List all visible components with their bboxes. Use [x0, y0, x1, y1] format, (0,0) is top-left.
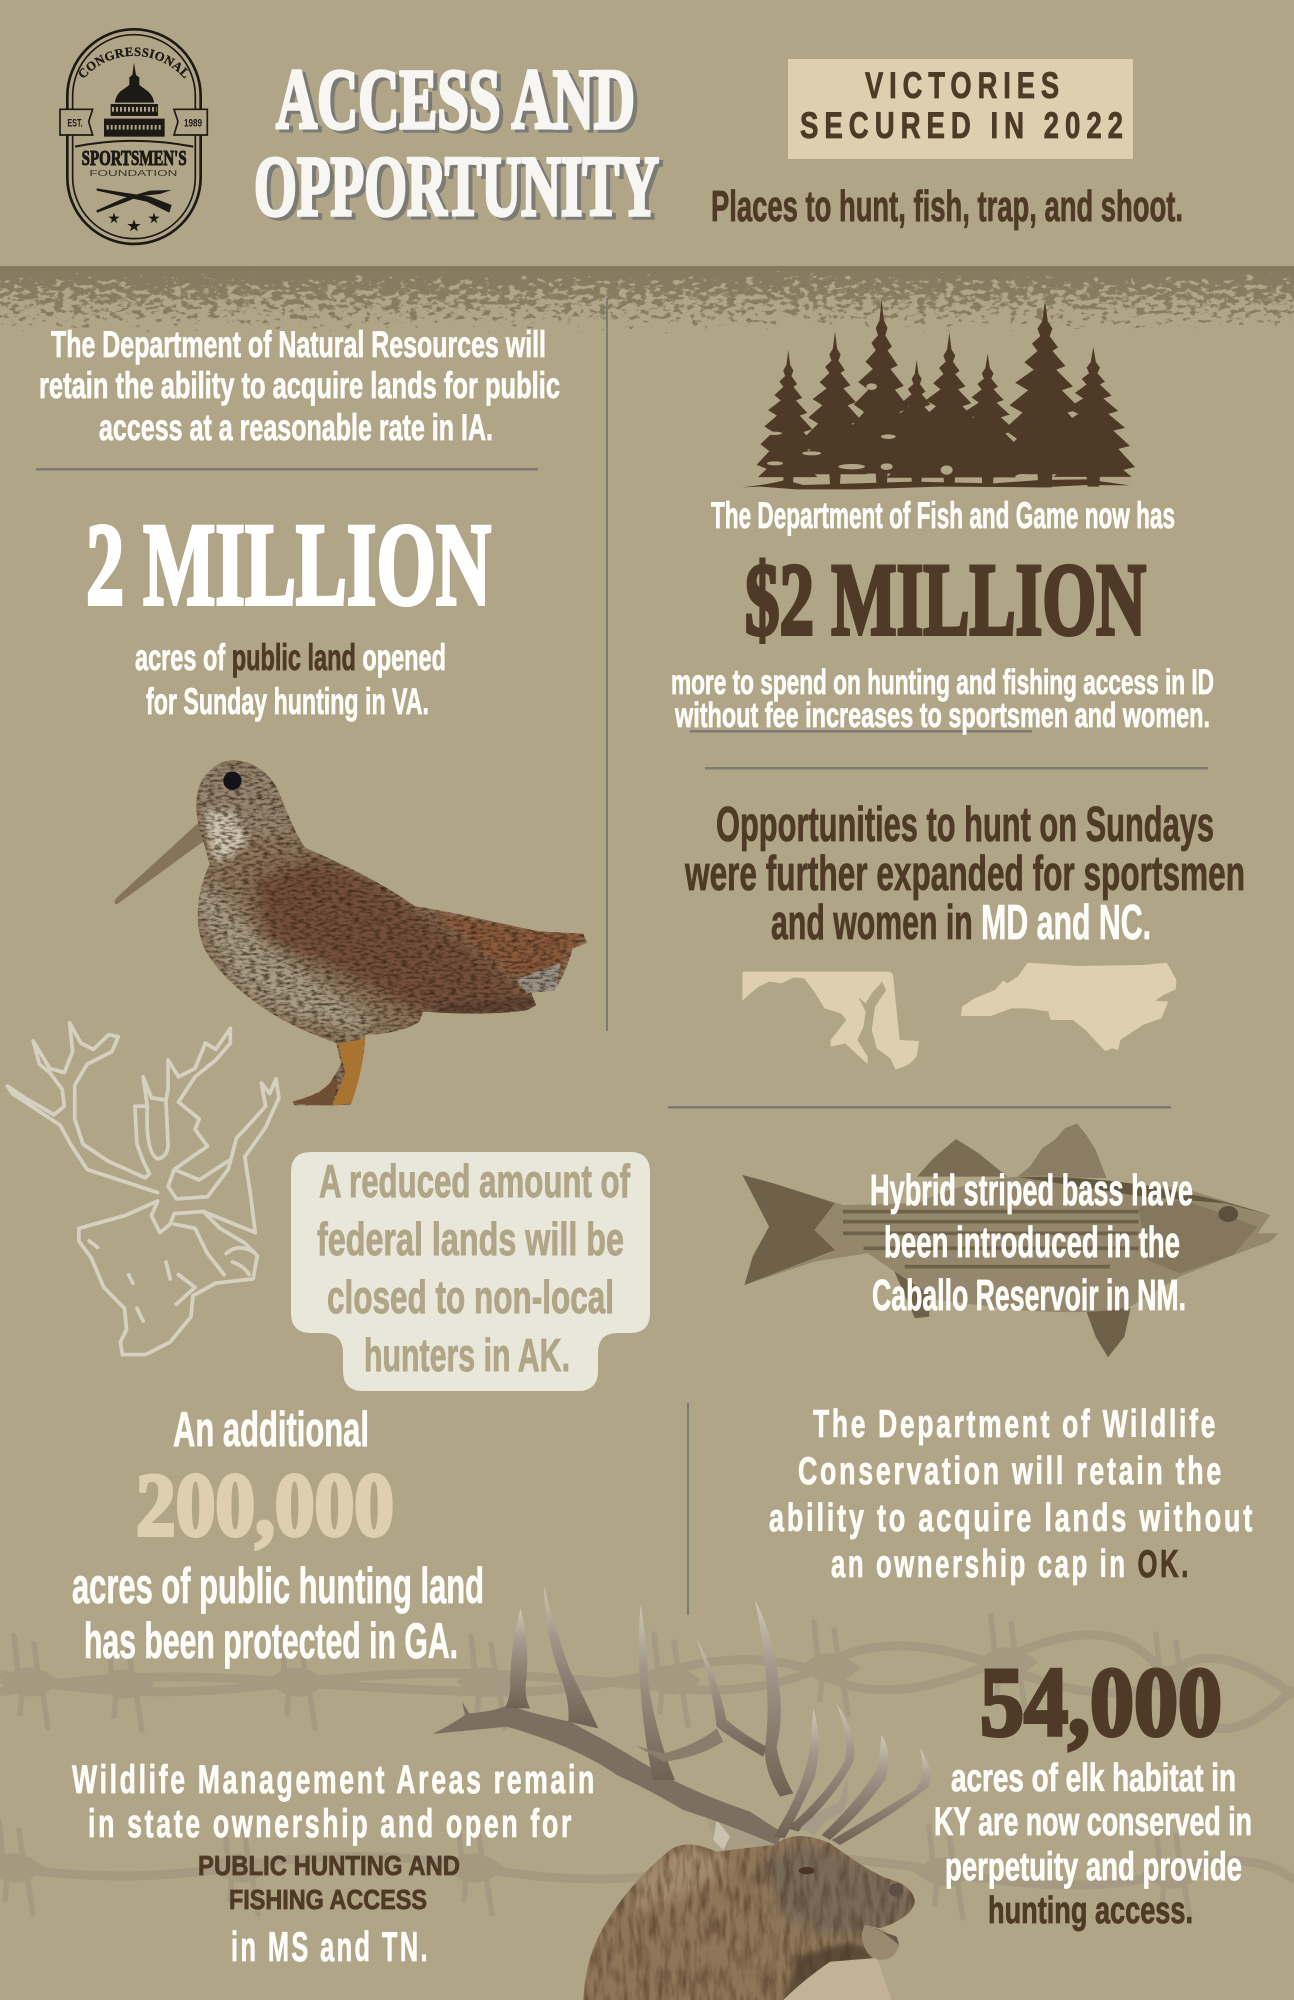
- text: Oklahoma wildlife conservation: [769, 1403, 1255, 1586]
- text: wildlife management areas: in MS and TN.: [231, 1923, 430, 1970]
- maps: Maryland and North Carolina: [742, 963, 1177, 1069]
- elk ear: [705, 1815, 773, 1875]
- stat: 2 million acres: for Sunday hunting in VA.: [146, 681, 429, 722]
- logo capitol: [104, 63, 165, 137]
- illustration: pine trees: [742, 300, 1135, 489]
- callout: federal lands in Alaska: closed to non-local: [327, 1271, 614, 1323]
- logo ribbons: EST.: [67, 118, 83, 130]
- text: Sunday hunting in MD and NC: and women in MD and NC.: [771, 896, 1151, 950]
- text: Iowa Department of Natural Resources: retain the ability to acquire lands for public: [39, 365, 560, 406]
- stat: 2 million acres: 2 MILLION: [86, 499, 491, 630]
- callout: federal lands in Alaska: [291, 1152, 650, 1391]
- logo wordmark: FOUNDATION: [89, 169, 178, 178]
- stat: 200,000 acres in Georgia: has been protected in GA.: [84, 1613, 458, 1669]
- badge: victories secured in 2022: VICTORIES: [865, 65, 1065, 106]
- logo: Congressional Sportsmen's Foundation badge: [59, 28, 208, 246]
- logo ribbons: 1989: [184, 118, 202, 130]
- stat: 200,000 acres in Georgia: 200,000: [136, 1456, 394, 1555]
- text: Oklahoma wildlife conservation: an ownership cap in OK.: [831, 1543, 1191, 1586]
- stat: 54,000 acres of elk habitat: 54,000: [980, 1648, 1222, 1757]
- title: OPPORTUNITY: [254, 138, 659, 234]
- text: wildlife management areas: in state ownership and open for: [88, 1802, 574, 1846]
- logo wordmark: [82, 148, 187, 178]
- illustration: striped bass: [742, 1123, 1278, 1357]
- stat: 54,000 acres of elk habitat: hunting access.: [988, 1890, 1193, 1932]
- barbed wire background: [0, 1616, 1294, 1920]
- callout: federal lands in Alaska: hunters in AK.: [364, 1329, 570, 1381]
- illustration: woodcock: [114, 753, 598, 1115]
- stat: 200,000 acres in Georgia: [72, 1403, 484, 1669]
- center vertical divider: [606, 298, 608, 1031]
- text: wildlife management areas: FISHING ACCESS: [229, 1884, 427, 1915]
- bird eye: [223, 772, 242, 790]
- map: North Carolina: [961, 963, 1177, 1051]
- text: Sunday hunting in MD and NC: [684, 798, 1245, 950]
- elk neck and head: [577, 1820, 923, 2000]
- text: wildlife management areas: [72, 1758, 597, 1970]
- text: Iowa Department of Natural Resources: The Department of Natural Resources will: [51, 324, 546, 365]
- title: ACCESS AND: [280, 54, 639, 150]
- logo arc text: CONGRESSIONAL: [79, 47, 188, 78]
- elk antlers: [433, 1586, 930, 1845]
- logo ribbons: [60, 109, 207, 135]
- illustration: bull elk: [433, 1586, 930, 2000]
- callout: federal lands in Alaska: A reduced amount of: [319, 1155, 630, 1207]
- badge: victories secured in 2022: SECURED IN 2022: [800, 105, 1129, 146]
- title: [254, 51, 663, 237]
- stat: 200,000 acres in Georgia: An additional: [173, 1403, 369, 1457]
- title: ACCESS AND: [276, 51, 635, 147]
- text: wildlife management areas: Wildlife Management Areas remain: [72, 1758, 597, 1802]
- lower vertical divider: [687, 1403, 689, 1615]
- text: wildlife management areas: PUBLIC HUNTING AND: [198, 1850, 460, 1881]
- stat: 200,000 acres in Georgia: acres of public hunting land: [72, 1558, 484, 1614]
- stat: $2 million for Idaho: [671, 495, 1214, 735]
- text: Iowa Department of Natural Resources: [39, 324, 560, 448]
- stat: 2 million acres: [86, 499, 491, 722]
- map: Maryland: [742, 972, 919, 1069]
- stat: 54,000 acres of elk habitat: [934, 1648, 1252, 1932]
- text: hybrid striped bass: [870, 1166, 1193, 1320]
- title: OPPORTUNITY: [258, 141, 663, 237]
- fish eye: [1218, 1206, 1238, 1222]
- speckled band divider: [0, 266, 1294, 335]
- badge: victories secured in 2022: [788, 59, 1133, 159]
- text: Iowa Department of Natural Resources: access at a reasonable rate in IA.: [99, 407, 493, 448]
- illustration: deer head outline: [7, 1023, 279, 1355]
- stat: 2 million acres: acres of public land opened: [135, 637, 446, 678]
- logo wordmark: SPORTSMEN'S: [82, 148, 187, 170]
- callout: federal lands in Alaska: federal lands will be: [317, 1213, 624, 1265]
- logo rifles and stars: [96, 188, 172, 231]
